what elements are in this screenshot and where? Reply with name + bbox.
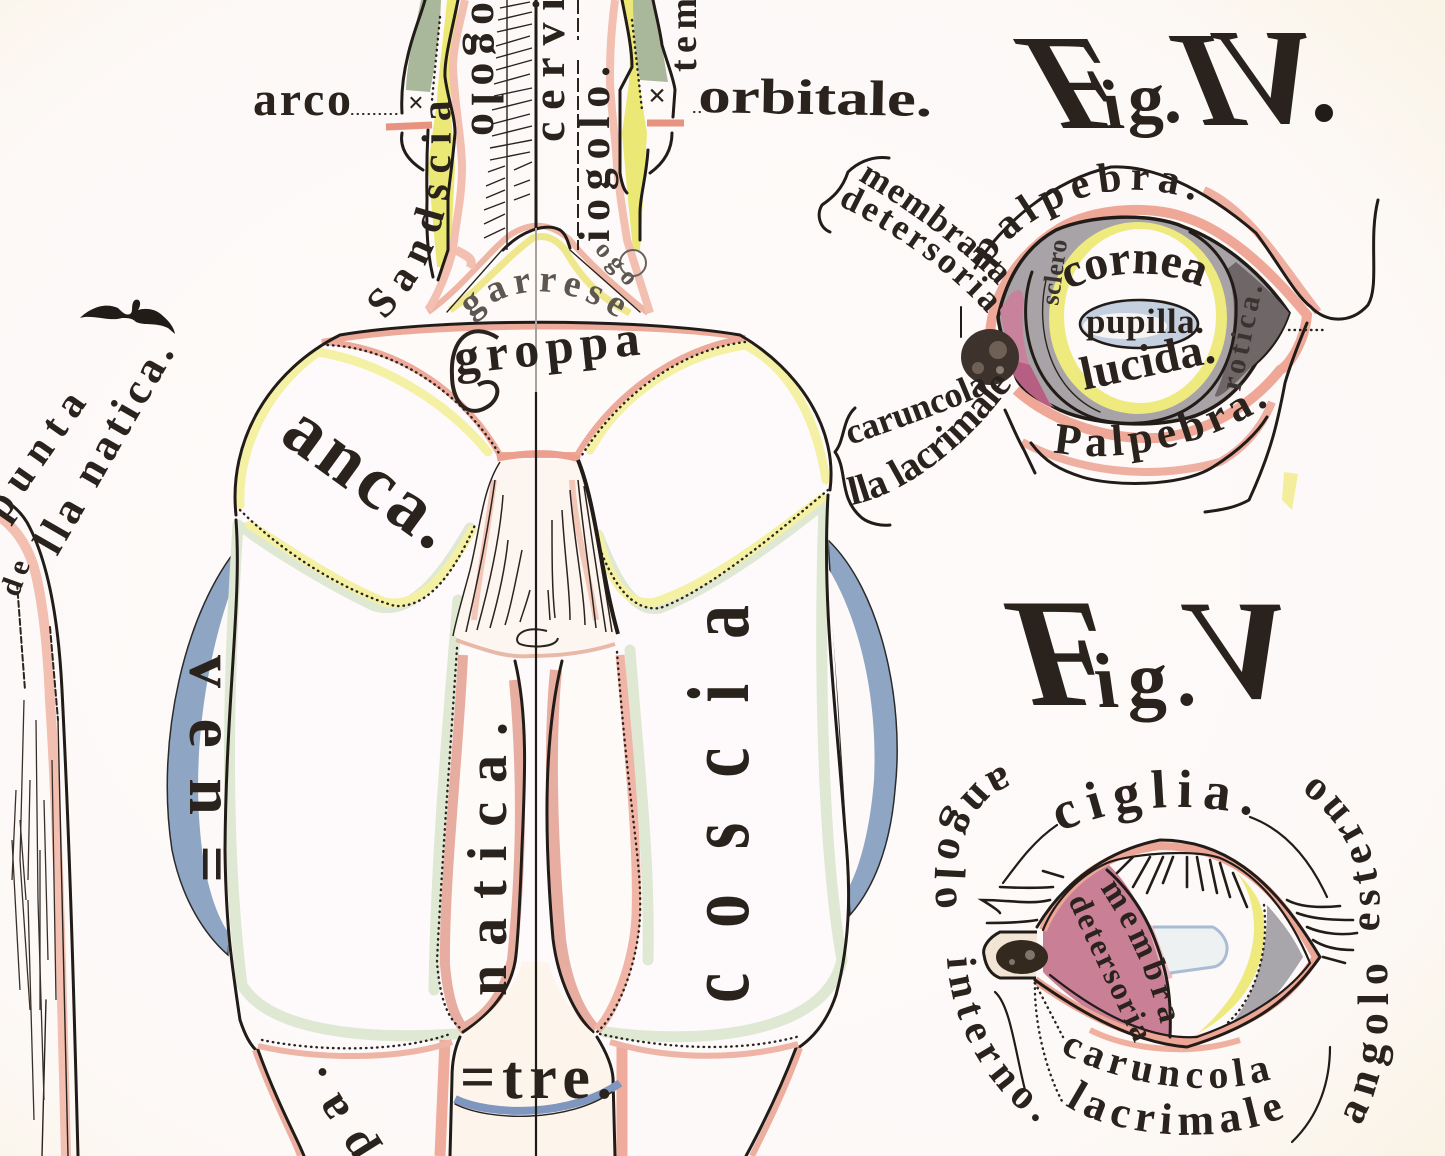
label: arco: arco <box>253 73 351 126</box>
label: sandscia: Sandscia <box>368 100 451 318</box>
membrana pink <box>1000 290 1055 408</box>
eye figure V: angolo <box>934 768 1010 908</box>
sclera <box>998 217 1289 424</box>
lower lid and lines <box>1031 417 1267 483</box>
neck hatching <box>484 0 578 250</box>
eyelashes <box>982 857 1357 963</box>
label: vena: ven= <box>175 655 248 883</box>
guide lines around eye <box>995 817 1330 1142</box>
title: Fig. IV: g. <box>1128 58 1182 138</box>
green wash right <box>598 505 842 1037</box>
eye figure IV: palpebra. <box>973 163 1194 270</box>
tail dock <box>453 454 618 657</box>
eye figure IV: caruncola <box>848 376 987 443</box>
main figure labels: × <box>408 88 424 119</box>
caruncle <box>984 932 1037 978</box>
rump fill <box>226 320 840 1046</box>
eye figure V: angolo <box>1344 964 1394 1124</box>
label: tem: tem <box>663 0 705 72</box>
eye labels: cornea <box>1064 250 1205 286</box>
label: natica: natica. <box>457 722 519 996</box>
eye labels: membra <box>1100 880 1175 1024</box>
neck left side <box>386 0 471 310</box>
eye figure IV: rotica. <box>1215 281 1269 393</box>
neck right side <box>610 0 684 313</box>
title: Fig. V: g. <box>1128 635 1206 722</box>
label: garrese: garrese <box>463 274 624 322</box>
green wash left <box>230 525 470 1036</box>
pupil outline <box>1153 927 1227 973</box>
pink croup band <box>322 326 745 455</box>
label: della natica: lla natica. <box>23 333 184 562</box>
dotted hip boundaries <box>240 510 475 606</box>
eye figure V: esterno <box>1306 779 1380 930</box>
eye figure IV: membrana <box>858 166 1007 286</box>
cornea ring <box>1049 222 1227 414</box>
eye figure IV: Palpebra. <box>1054 398 1266 464</box>
outer black outline <box>235 322 831 515</box>
title: Fig. IV: I <box>1151 4 1265 155</box>
eye figure IV: lucida. <box>1075 322 1219 401</box>
title: Fig. IV: i <box>1095 66 1128 144</box>
gray iris <box>1228 905 1303 1027</box>
title: Fig. V: V <box>1170 572 1316 728</box>
withers and garrese arch <box>428 226 648 313</box>
yellow hip right <box>590 345 826 603</box>
flourish over natica label <box>80 300 175 334</box>
title: Fig. V: i <box>1088 637 1122 724</box>
title: Fig. V: F <box>991 568 1135 739</box>
label: orbitale: orbitale. <box>698 67 933 127</box>
title: Fig. IV <box>993 2 1343 158</box>
label: groppa: groppa <box>451 310 642 385</box>
natica left panel <box>437 648 525 1032</box>
label: coscia: coscia <box>671 605 768 1003</box>
eye figure IV <box>818 156 1380 514</box>
magenta membrane <box>1043 863 1170 1037</box>
label: tre: =tre. <box>460 1044 612 1112</box>
eye figure V: detersoria <box>1070 897 1146 1043</box>
paint fleck <box>1282 472 1298 510</box>
eye figure V: caruncola <box>1064 1038 1271 1088</box>
eye white <box>1035 840 1320 1047</box>
lid lines <box>1035 846 1316 1042</box>
eye figure V: interno. <box>946 957 1039 1122</box>
eye figure IV: detersoria <box>841 187 996 314</box>
label: anca: anca. <box>268 386 471 565</box>
perineum and blue band <box>440 962 622 1156</box>
label: cervi: cervi <box>523 0 574 142</box>
caruncle blob <box>961 329 1019 385</box>
eyelid washes <box>1022 190 1318 472</box>
upper eyelid line <box>975 167 1378 319</box>
title: Fig. IV: F <box>993 7 1160 158</box>
blue vein right <box>828 540 897 915</box>
brace: caruncola <box>835 408 890 525</box>
pupil <box>1080 300 1198 348</box>
eye figure IV: lla lacrimale <box>846 376 1011 505</box>
yellow crescent <box>1197 873 1265 1034</box>
blue vein left <box>167 545 240 955</box>
title: Fig. V <box>991 568 1316 739</box>
eye figure IV: pupilla. <box>1086 302 1204 341</box>
eye figure IV: sclero <box>1035 237 1073 307</box>
eye figure V: ciglia. <box>1056 770 1250 828</box>
main figure labels: × <box>648 77 666 113</box>
yellow hip left <box>240 352 488 603</box>
main figure labels: ogo <box>590 235 645 291</box>
main figure labels <box>0 0 933 1156</box>
midline <box>534 0 538 1156</box>
label: iogolo: iogolo. <box>570 66 619 242</box>
title: Fig. IV: V <box>1199 2 1343 152</box>
label: ogolo: ogolo <box>462 2 513 136</box>
natica right panel <box>547 652 640 1032</box>
hind legs lower <box>255 1048 800 1156</box>
left hind leg fragment <box>0 497 78 1156</box>
